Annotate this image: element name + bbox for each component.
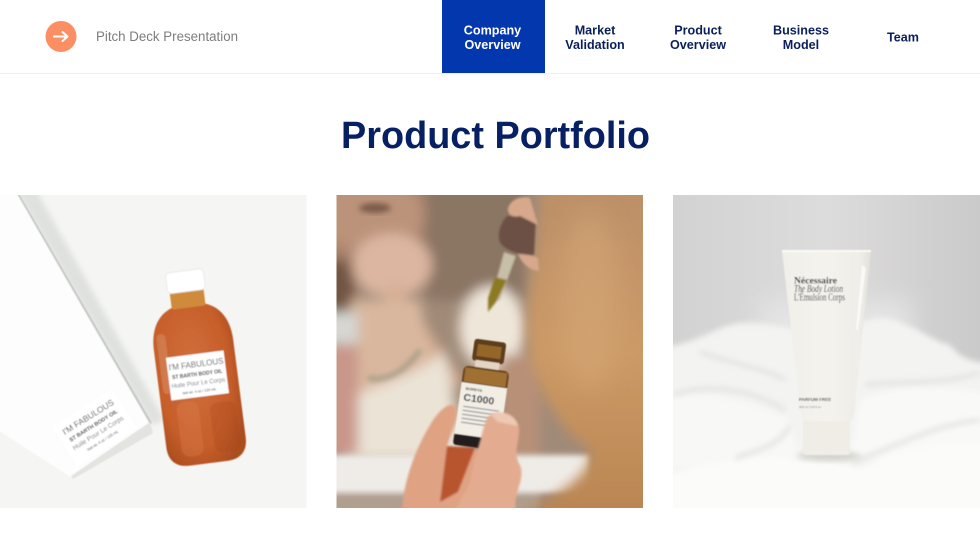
- serum label: C1000: [463, 392, 495, 408]
- box label: ST BARTH BODY OIL: [69, 409, 120, 444]
- nav: Business Model: Business: [773, 24, 829, 38]
- fabric: [673, 318, 980, 508]
- icon: oil bottle: [152, 270, 247, 467]
- panel: serum dropper photo: [336, 195, 643, 508]
- tube label: [794, 276, 845, 409]
- bottle label: I'M FABULOUS: [168, 357, 224, 373]
- serum label: [454, 382, 507, 440]
- icon: lotion tube: [782, 250, 871, 461]
- tube label: L'Émulsion Corps: [794, 292, 845, 304]
- tube label: PARFUM FREE: [799, 397, 831, 402]
- nav: Team: Team: [887, 30, 919, 44]
- tube label: The Body Lotion: [794, 284, 843, 295]
- box label: Huile Pour Le Corps: [72, 415, 126, 452]
- icon: serum bottle: [453, 337, 513, 451]
- icon: arrow badge: [46, 21, 76, 52]
- nav: Market Validation: [565, 24, 625, 52]
- box label: [62, 399, 124, 451]
- panel: body oil photo: [0, 190, 306, 508]
- nav: Product Overview: [670, 24, 726, 52]
- bottle label: Huile Pour Le Corps: [171, 377, 226, 390]
- title: Product Portfolio: [341, 115, 650, 157]
- box shadow edge: [16, 190, 164, 425]
- bottle label: [166, 350, 229, 400]
- nav: active tab Company Overview: [442, 0, 545, 73]
- nav: Market Validation: Market: [575, 24, 616, 38]
- box label: Net wt. 4 oz / 120 mL: [87, 430, 119, 452]
- serum label: BOREYA: [465, 386, 483, 393]
- nav: Product Overview: Overview: [670, 38, 726, 52]
- box label: I'M FABULOUS: [61, 397, 116, 437]
- nav: Business Model: Model: [783, 38, 819, 52]
- nav: active tab Company Overview: Overview: [464, 38, 521, 52]
- icon: product box: [0, 190, 153, 479]
- icon: holding hand: [402, 405, 522, 510]
- icon: dropper: [488, 197, 539, 312]
- bottle label: ST BARTH BODY OIL: [172, 369, 223, 381]
- mirror counter: [336, 451, 592, 508]
- nav: Business Model: [773, 24, 829, 52]
- tube label: 200 ml / 6.8 fl oz: [799, 405, 822, 409]
- bottle label: Net wt. 4 oz / 120 mL: [182, 387, 217, 395]
- nav: Product Overview: Product: [674, 24, 723, 38]
- nav: Market Validation: Validation: [565, 38, 625, 52]
- nav: active tab Company Overview: Company: [464, 24, 521, 38]
- panel: body lotion photo: [673, 195, 980, 473]
- header bar: [0, 0, 980, 74]
- tube label: Nécessaire: [794, 276, 837, 286]
- deck label: Pitch Deck Presentation: [96, 29, 238, 44]
- hair foreground: [519, 195, 643, 508]
